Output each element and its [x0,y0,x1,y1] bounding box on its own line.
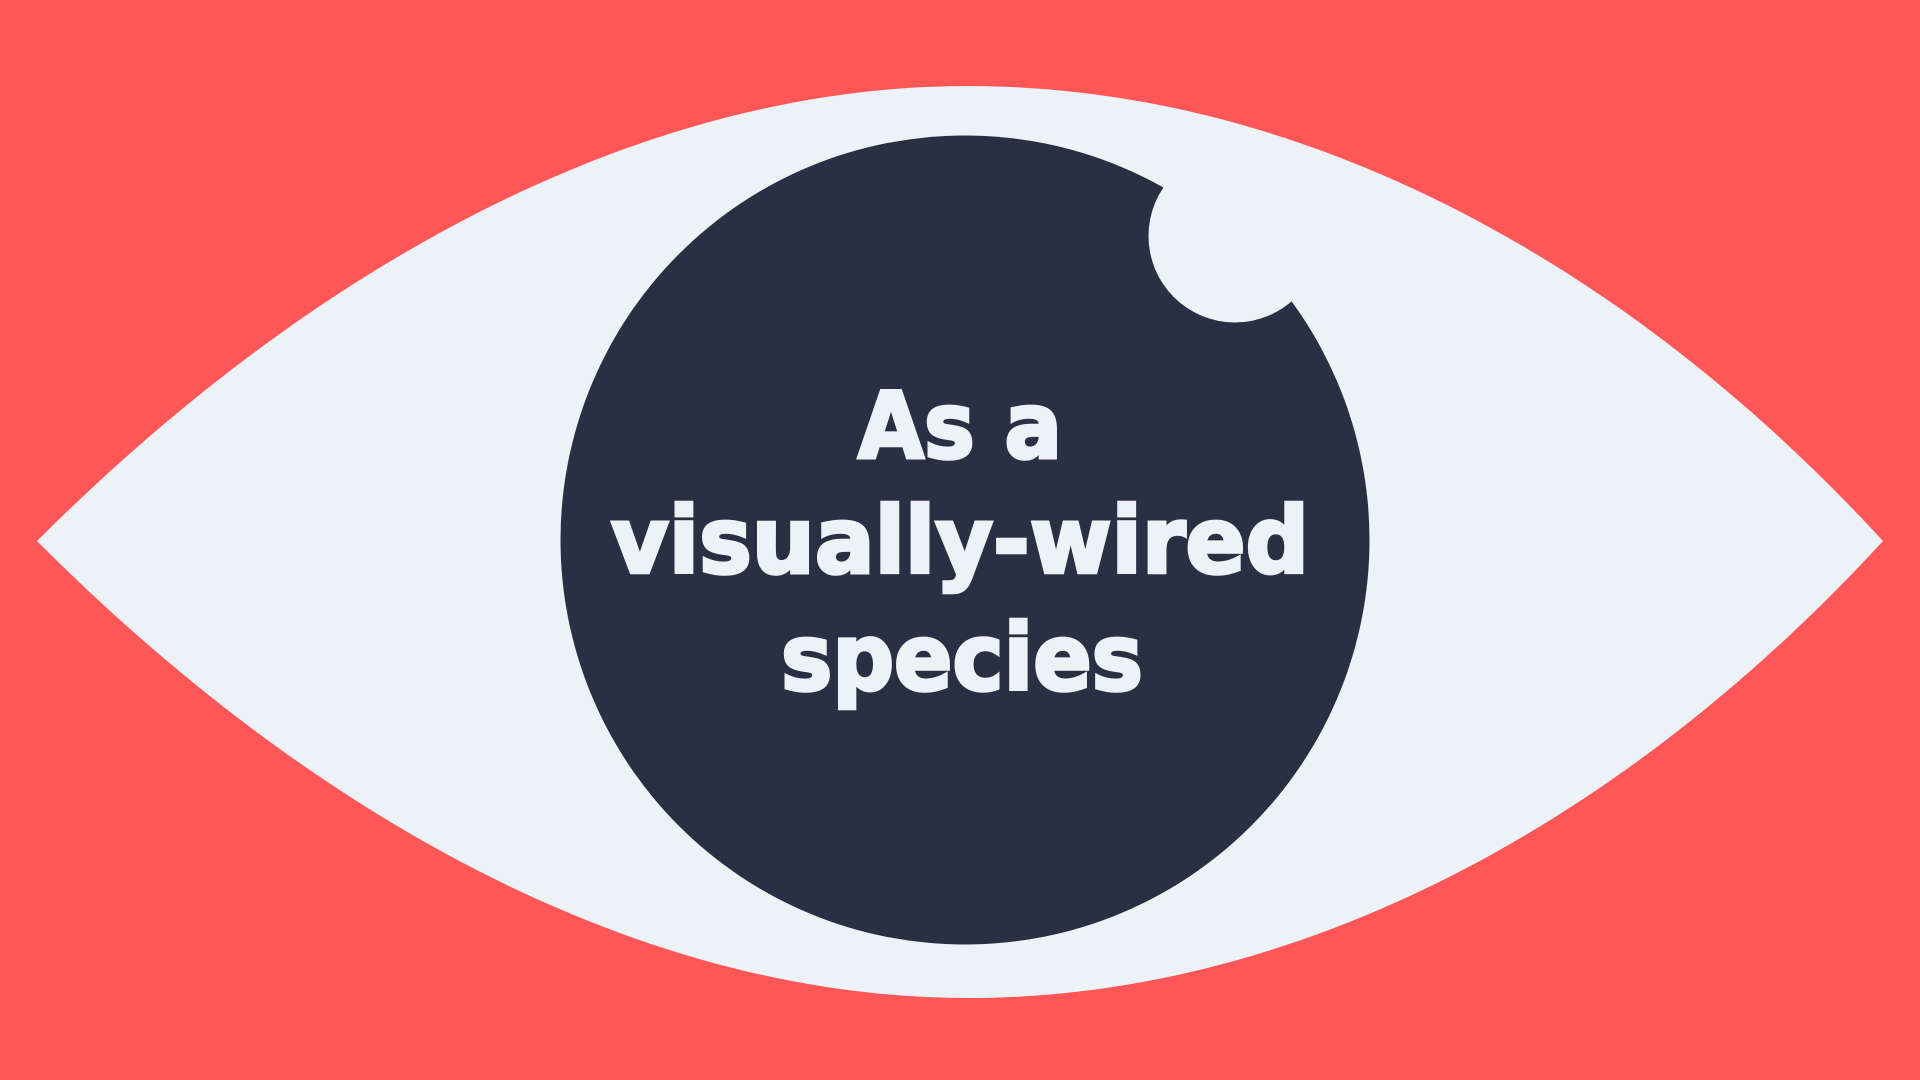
line: visually-wired: visually-wired [611,488,1309,594]
headline text [611,372,1309,712]
line: species: species [781,604,1143,712]
eye highlight [1148,150,1322,322]
line: As a: As a [858,372,1062,480]
iris [560,136,1370,944]
